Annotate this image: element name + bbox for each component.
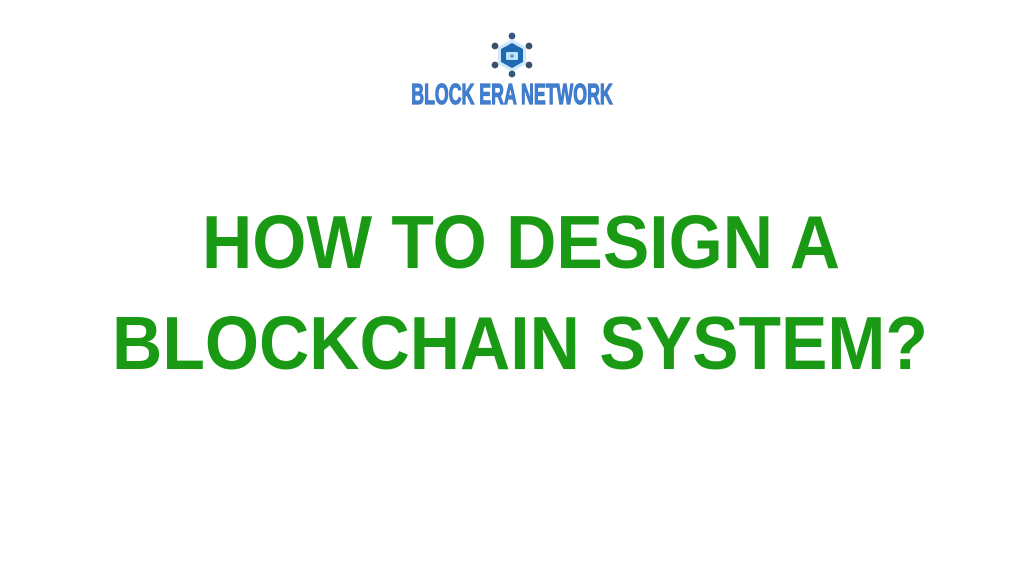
logo wordmark: BLOCK ERA NETWORK bbox=[411, 79, 613, 111]
logo bbox=[411, 32, 614, 111]
title line 1: HOW TO DESIGN A bbox=[202, 200, 840, 284]
icon: blockchain hexagon network bbox=[492, 32, 532, 78]
title bbox=[112, 200, 928, 385]
title line 2: BLOCKCHAIN SYSTEM? bbox=[112, 301, 928, 385]
